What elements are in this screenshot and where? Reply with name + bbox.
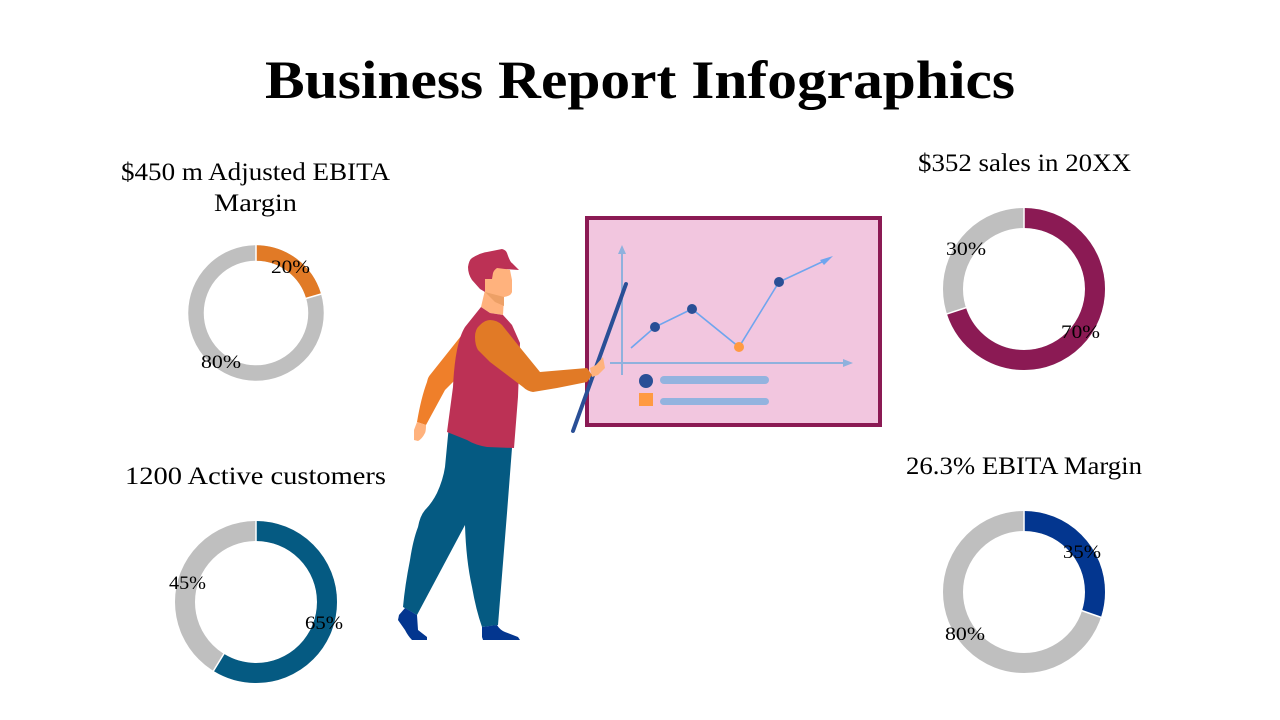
- neck shadow: [485, 292, 504, 306]
- presenter figure: [398, 249, 626, 640]
- donut chart: 70 / 30: 70%: [1061, 322, 1100, 343]
- heading: active customers: 1200 Active customers: [125, 463, 386, 490]
- donut chart: 70 / 30: 30%: [946, 239, 986, 260]
- back arm: [417, 336, 461, 425]
- donut chart: 20 / 80: 80%: [201, 352, 241, 373]
- donut chart: 35 / 80: 80%: [945, 624, 985, 645]
- presentation board: [587, 218, 880, 425]
- vest: [447, 307, 520, 448]
- back hand: [414, 422, 426, 441]
- donut chart: 35 / 80: 35%: [1063, 542, 1101, 563]
- chart legend: [639, 374, 769, 406]
- pointer stick: [573, 284, 626, 431]
- donut chart: 65 / 45: 65%: [305, 613, 343, 634]
- pointing arm: [475, 320, 592, 392]
- title: Business Report Infographics: [265, 50, 1015, 110]
- neck and face: [481, 266, 512, 315]
- line chart: [631, 256, 833, 352]
- right foot: [482, 625, 520, 640]
- donut chart: 20 / 80: [196, 243, 323, 373]
- heading: sales: $352 sales in 20XX: [918, 150, 1131, 177]
- hair: [468, 249, 519, 292]
- donut chart: 70 / 30: [945, 206, 1100, 360]
- donut chart: 65 / 45: [169, 519, 343, 673]
- donut chart: 65 / 45: 45%: [169, 573, 206, 594]
- chart axes: [610, 245, 853, 375]
- heading: adjusted EBITA margin: $450 m Adjusted EBITA: [121, 159, 390, 186]
- pants: [403, 425, 512, 627]
- panel: adjusted EBITA margin: [121, 159, 390, 373]
- heading: EBITA margin: 26.3% EBITA Margin: [906, 453, 1143, 480]
- panel: EBITA margin: [906, 453, 1143, 663]
- panel: sales: [918, 150, 1131, 360]
- panel: active customers: [125, 463, 386, 673]
- heading: adjusted EBITA margin: Margin: [214, 190, 298, 217]
- heading: adjusted EBITA margin: [121, 159, 390, 217]
- donut chart: 35 / 80: [945, 509, 1103, 663]
- left foot: [398, 608, 427, 640]
- pointing hand: [590, 357, 605, 377]
- donut chart: 20 / 80: 20%: [271, 257, 310, 278]
